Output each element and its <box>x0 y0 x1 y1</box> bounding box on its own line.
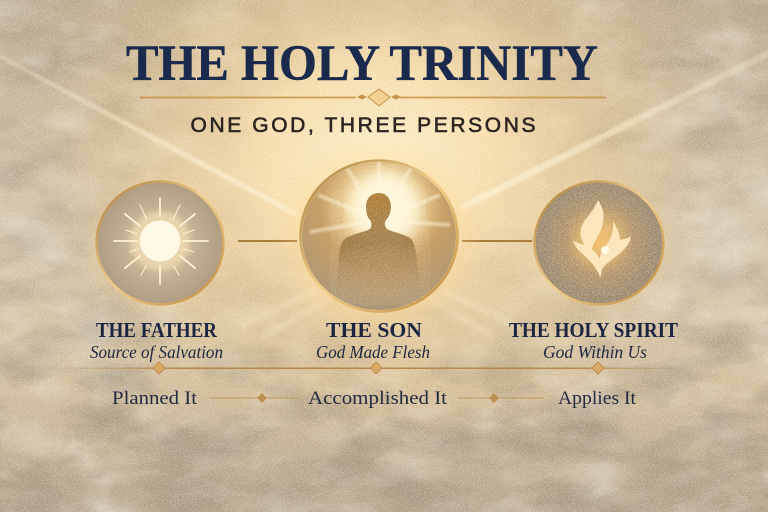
medallion: The Son (silhouette) <box>282 144 476 324</box>
label: The Father: THE FATHER <box>96 318 218 342</box>
icon: human silhouette <box>338 193 418 280</box>
title: THE HOLY TRINITY <box>126 36 598 92</box>
role: Planned It: Planned It <box>112 388 198 409</box>
light rays: below the Son <box>238 288 520 338</box>
medallion: The Father (sun) <box>95 180 225 306</box>
connector ornament: second <box>458 393 544 403</box>
title ornament: divider with diamond <box>140 89 606 106</box>
label: The Holy Spirit <box>509 318 678 362</box>
light ray: upper right diagonal <box>460 50 768 211</box>
icon: flame <box>573 200 631 278</box>
medallion: The Holy Spirit (flame) <box>533 180 665 306</box>
label: The Son: God Made Flesh <box>316 342 430 362</box>
light ray: upper left diagonal <box>0 54 298 217</box>
label: The Son <box>316 318 430 362</box>
rays behind silhouette <box>310 160 450 232</box>
connector: Father to Son <box>238 240 297 242</box>
subtitle: ONE GOD, THREE PERSONS <box>190 114 536 137</box>
role: Accomplished It: Accomplished It <box>308 388 448 409</box>
icon: sun <box>114 198 208 284</box>
connector ornament: first <box>210 393 298 403</box>
label: The Holy Spirit: THE HOLY SPIRIT <box>509 318 678 342</box>
role: Applies It: Applies It <box>558 388 637 409</box>
label: The Father <box>90 318 223 362</box>
label: The Father: Source of Salvation <box>90 342 223 362</box>
label: The Son: THE SON <box>326 318 422 342</box>
divider with three diamonds <box>55 362 695 374</box>
connector: Son to Spirit <box>462 240 532 242</box>
label: The Holy Spirit: God Within Us <box>543 342 647 362</box>
